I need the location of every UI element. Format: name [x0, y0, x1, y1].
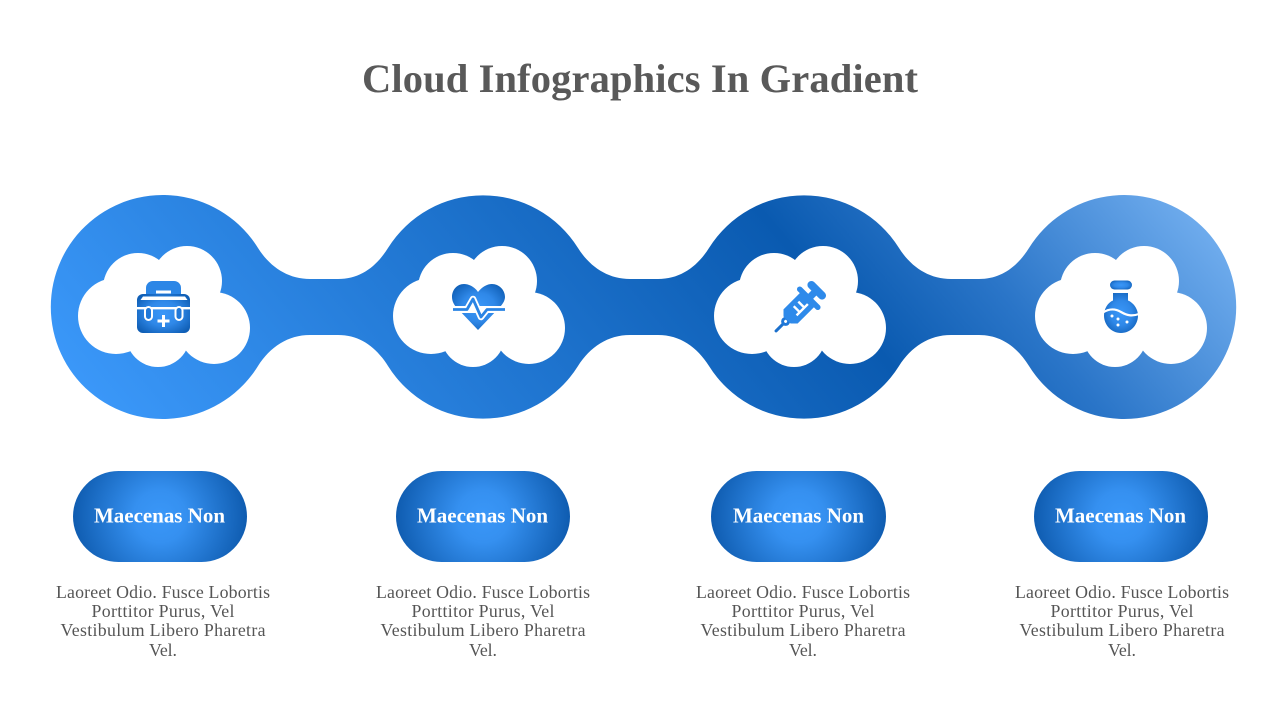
- icon: medical kit: [137, 281, 190, 333]
- description 1: Porttitor Purus, Vel: [92, 601, 235, 621]
- cloud 4: [1035, 246, 1207, 367]
- label pill 3: [711, 471, 886, 562]
- description 4: Laoreet Odio. Fusce Lobortis: [1015, 582, 1229, 602]
- description 1: [56, 582, 270, 660]
- label pill 3: Maecenas Non: [733, 504, 864, 528]
- description 3: Porttitor Purus, Vel: [732, 601, 875, 621]
- description 4: Vestibulum Libero Pharetra: [1020, 620, 1225, 640]
- description 2: Vestibulum Libero Pharetra: [380, 620, 586, 640]
- description 4: Vel.: [1108, 640, 1136, 660]
- label pill 2: Maecenas Non: [417, 504, 548, 528]
- description 1: Laoreet Odio. Fusce Lobortis: [56, 582, 270, 602]
- description 3: Vel.: [789, 640, 817, 660]
- description 3: [696, 582, 910, 660]
- title: Cloud Infographics In Gradient: [362, 56, 918, 101]
- cloud 3: [714, 246, 886, 367]
- description 1: Vestibulum Libero Pharetra: [60, 620, 266, 640]
- description 4: Porttitor Purus, Vel: [1050, 601, 1194, 621]
- description 3: Laoreet Odio. Fusce Lobortis: [696, 582, 910, 602]
- label pill 4: Maecenas Non: [1055, 504, 1186, 528]
- label pill 1: Maecenas Non: [94, 504, 225, 528]
- icon: syringe: [764, 276, 831, 343]
- icon: heart with pulse: [450, 284, 507, 330]
- cloud 1: [78, 246, 250, 367]
- description 2: Laoreet Odio. Fusce Lobortis: [376, 582, 590, 602]
- description 4: [1015, 582, 1229, 660]
- description 2: Vel.: [469, 640, 497, 660]
- description 1: Vel.: [149, 640, 177, 660]
- description 2: [376, 582, 590, 660]
- description 3: Vestibulum Libero Pharetra: [700, 620, 906, 640]
- cloud 2: [393, 246, 565, 367]
- icon: flask: [1103, 280, 1139, 333]
- label pill 4: [1034, 471, 1208, 562]
- description 2: Porttitor Purus, Vel: [412, 601, 555, 621]
- gradient connected band: [51, 195, 1236, 419]
- label pill 1: [73, 471, 247, 562]
- label pill 2: [396, 471, 570, 562]
